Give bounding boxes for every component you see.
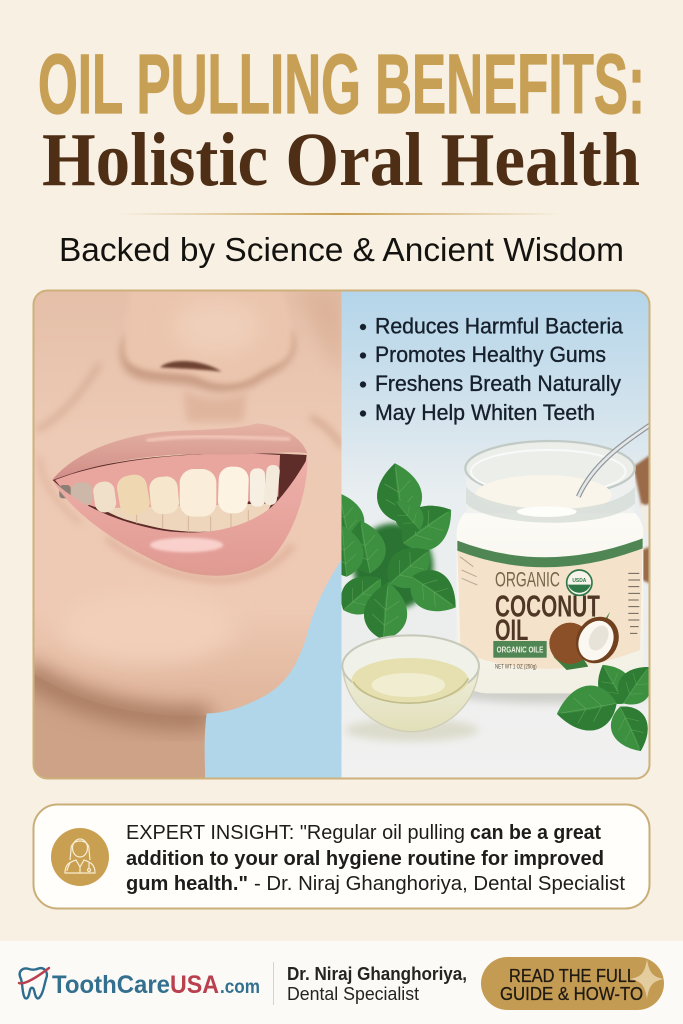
benefit 1: Reduces Harmful Bacteria: [375, 314, 624, 338]
quote text: - Dr. Niraj Ghanghoriya, Dental Specialist: [254, 872, 625, 895]
icon: tooth: [19, 968, 49, 998]
gold divider: [118, 213, 564, 215]
coconut oil jar: COCONUT: [495, 590, 600, 624]
author credit: Dental Specialist: [287, 984, 419, 1004]
lower lip: [53, 458, 307, 576]
quote text: addition to your oral hygiene routine for improved: [126, 847, 604, 870]
benefit 4: May Help Whiten Teeth: [375, 400, 595, 425]
heading: holistic oral health: Holistic Oral Health: [42, 118, 640, 202]
title: [38, 37, 645, 202]
button: read the full guide: READ THE FULL: [509, 966, 636, 986]
author credit: [287, 964, 467, 1004]
spoon: [578, 425, 650, 497]
quote text: [126, 821, 625, 895]
logo: ToothCareUSA: .com: [220, 977, 260, 998]
neck shadow: [34, 674, 206, 778]
upper teeth: [59, 464, 280, 517]
photo: smiling mouth: [23, 290, 343, 783]
mouth interior: [53, 453, 307, 535]
logo: ToothCareUSA: USA: [170, 971, 219, 999]
subtitle: Backed by Science & Ancient Wisdom: [59, 231, 624, 268]
gums: [55, 453, 280, 513]
icon: doctor: [51, 828, 109, 886]
coconut oil jar: OIL: [495, 614, 528, 647]
benefit 1: [360, 317, 624, 334]
oil bowl: [342, 635, 479, 741]
benefit 2: Promotes Healthy Gums: [375, 342, 606, 367]
mint sprig right: [556, 664, 648, 752]
label: [457, 547, 643, 669]
logo: ToothCareUSA: [19, 968, 260, 999]
nose: [121, 330, 295, 392]
author credit: Dr. Niraj Ghanghoriya,: [287, 964, 467, 984]
quote text: can be a great: [470, 821, 601, 844]
lower teeth: [102, 503, 272, 532]
footer band: [0, 941, 683, 1024]
label text: ORGANIC: [495, 568, 560, 592]
mint sprig left: [342, 463, 456, 638]
coconut oil jar: USDA: [572, 578, 586, 584]
quote text: EXPERT INSIGHT: "Regular oil pulling: [126, 821, 465, 844]
upper lip: [52, 423, 307, 481]
smile creases: [37, 363, 100, 430]
callout: expert insight: [34, 804, 650, 908]
coconut oil jar: ORGANIC OILE: [497, 645, 543, 655]
quote text: gum health.": [126, 872, 248, 895]
icon: spoon background coconut: [634, 454, 648, 506]
button: read the full guide: GUIDE & HOW-TO: [500, 984, 643, 1004]
coconut oil jar: [453, 425, 653, 703]
photo: coconut oil and mint: [342, 292, 648, 778]
coconut oil jar: NET WT 1 OZ (250g): [495, 664, 537, 671]
coconut illustration: [553, 656, 588, 670]
USDA seal: [567, 570, 592, 595]
panel: photo collage: [23, 290, 662, 783]
benefit 3: Freshens Breath Naturally: [375, 371, 621, 396]
button: read the full guide: [481, 957, 664, 1010]
nutrition side panel: [460, 557, 640, 633]
benefits list: [360, 314, 624, 425]
logo: ToothCareUSA: ToothCare: [52, 971, 170, 999]
